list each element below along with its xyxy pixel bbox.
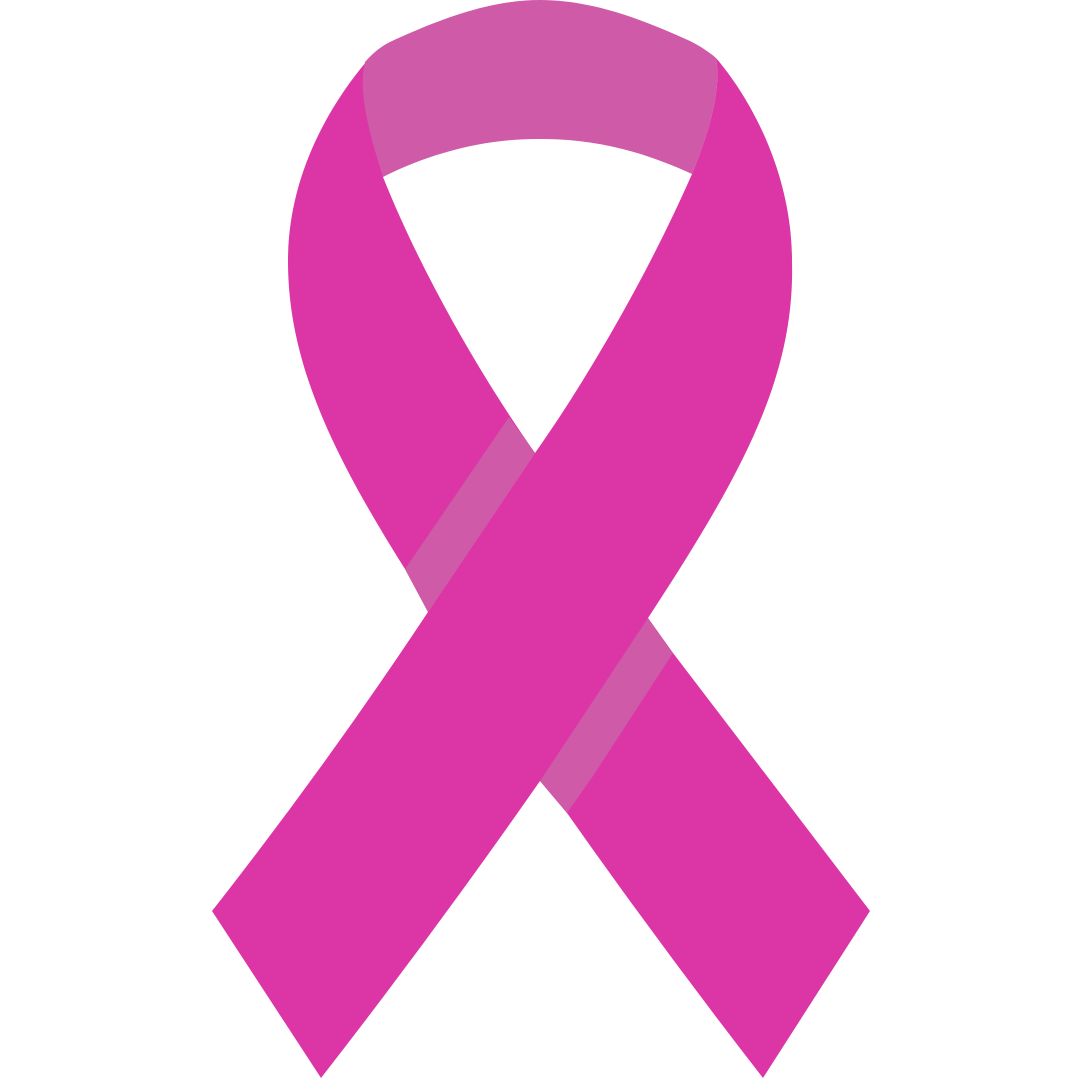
fold shadow: lower crossing bbox=[540, 618, 673, 813]
ribbon back band: left lobe to lower right tail bbox=[288, 62, 870, 1078]
fold shadow: upper crossing bbox=[405, 417, 535, 612]
ribbon top loop: lighter fold bbox=[363, 0, 717, 177]
ribbon front band: right lobe to lower left tail bbox=[212, 58, 792, 1078]
